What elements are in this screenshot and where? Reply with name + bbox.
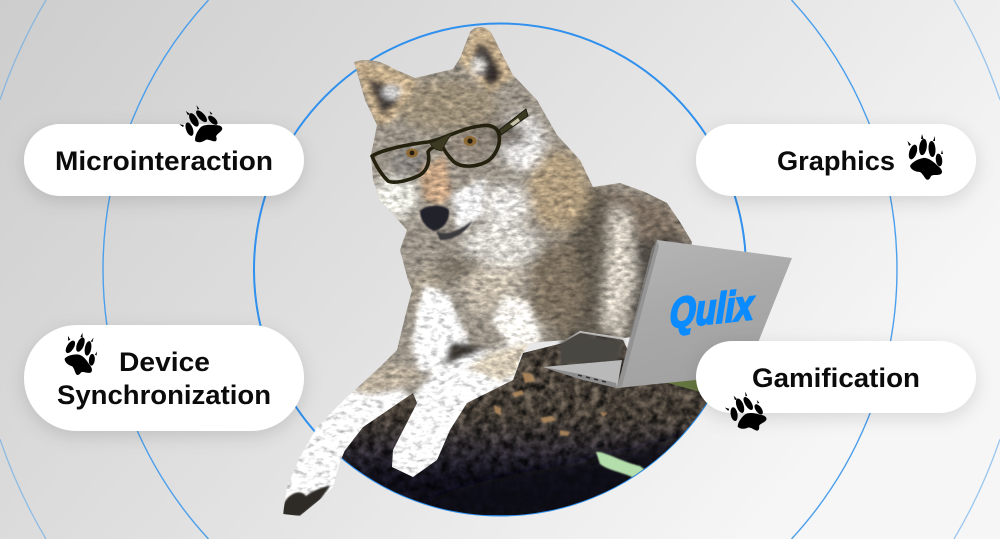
pill: Gamification bbox=[696, 341, 976, 413]
pill: Microinteraction bbox=[24, 124, 304, 196]
logo: Qulix bbox=[667, 280, 758, 337]
shadow under chest bbox=[440, 338, 484, 370]
pill: Microinteraction: Microinteraction bbox=[55, 146, 273, 176]
wolf bbox=[270, 20, 700, 530]
pill: Graphics: Graphics bbox=[777, 146, 895, 176]
eye shading bbox=[390, 148, 426, 176]
muzzle bbox=[420, 155, 452, 205]
pill: Device Synchronization bbox=[24, 325, 304, 431]
rear leg bbox=[270, 385, 415, 530]
back and shoulder fur bbox=[596, 186, 691, 244]
nose bbox=[420, 206, 472, 240]
laptop lid bbox=[617, 240, 792, 388]
rock inside circle bbox=[342, 331, 707, 516]
leaf bbox=[595, 450, 644, 478]
front leg bbox=[392, 342, 528, 477]
ears bbox=[352, 26, 514, 126]
paw tip bbox=[283, 486, 330, 516]
white chest bbox=[412, 285, 468, 372]
pill: Gamification: Gamification bbox=[752, 363, 920, 393]
glasses bbox=[372, 109, 528, 182]
laptop bbox=[543, 240, 792, 388]
eyes bbox=[406, 136, 476, 158]
icon: paw prints bbox=[59, 99, 943, 439]
pill: Device Synchronization: Synchronization bbox=[57, 380, 271, 410]
laptop base bbox=[543, 360, 622, 388]
pill: Graphics bbox=[696, 124, 976, 196]
pill: Device Synchronization: Device bbox=[119, 347, 210, 377]
